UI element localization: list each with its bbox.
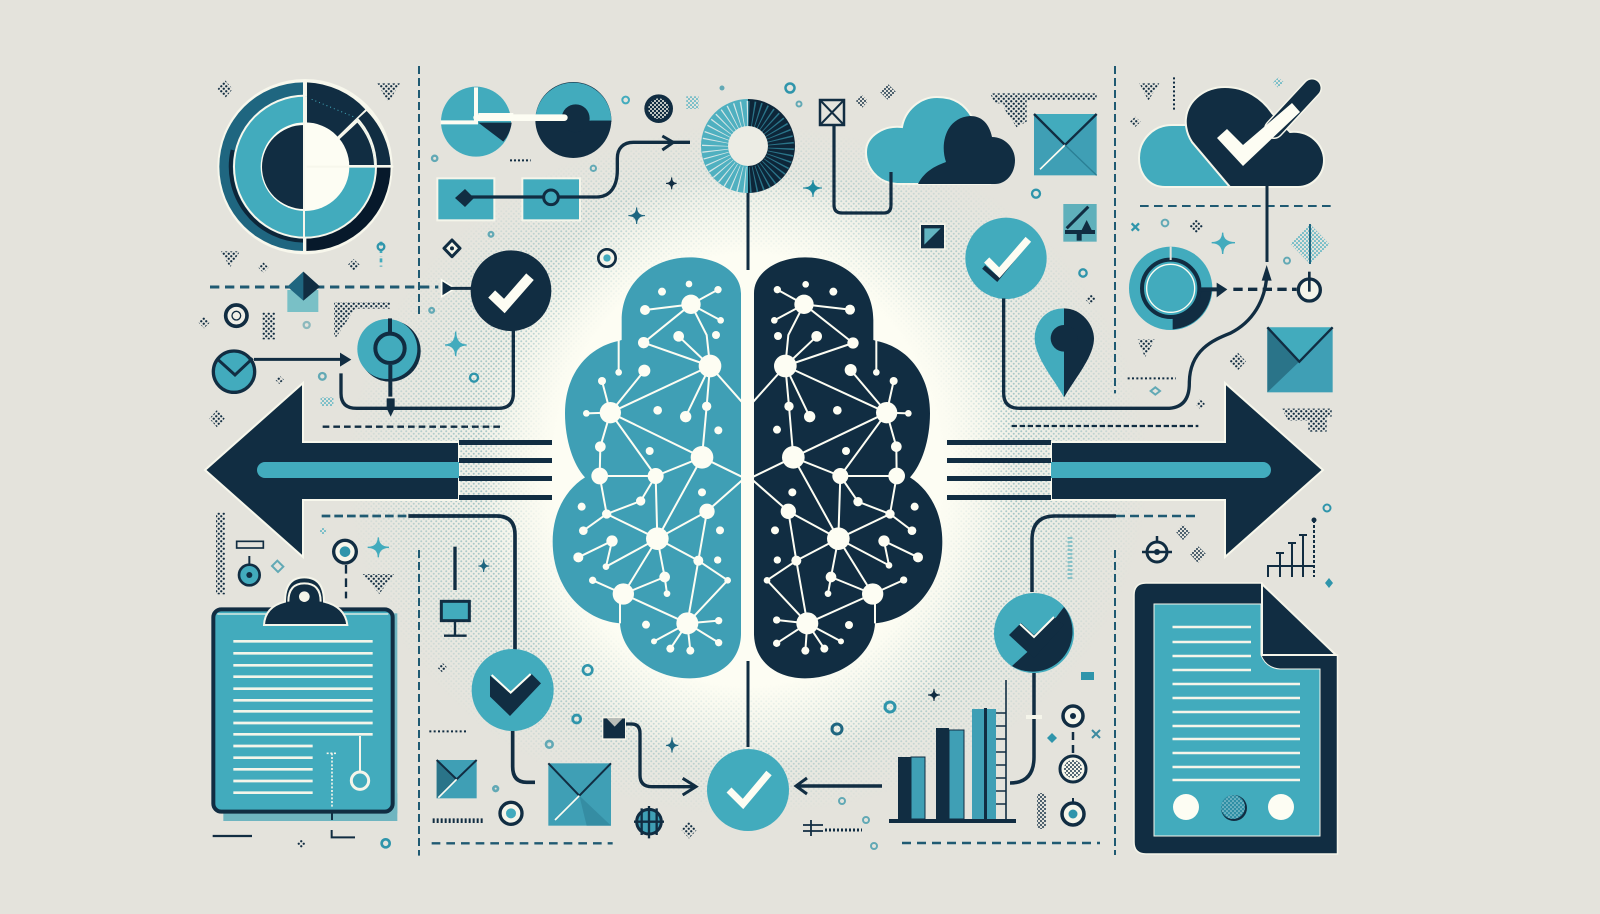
clipboard xyxy=(213,577,397,821)
icon: ring with stem xyxy=(239,556,260,585)
clipboard clip xyxy=(264,577,347,625)
top-left quadrant xyxy=(198,66,699,427)
brain: left hemisphere xyxy=(553,257,742,678)
connector: brain top line xyxy=(746,193,750,270)
brain xyxy=(553,257,942,678)
cloud: teal and navy xyxy=(866,97,1015,184)
check circle: teal xyxy=(965,218,1047,299)
bar chart xyxy=(889,680,1016,823)
check circle: bottom centre xyxy=(707,749,789,831)
icon: small teal ring 2 xyxy=(591,166,596,171)
small bar xyxy=(237,541,263,548)
document lines xyxy=(1172,627,1300,780)
arrow: right xyxy=(947,383,1323,557)
connector: arrow into bottom check xyxy=(796,778,882,794)
small decorations: top centre xyxy=(720,84,896,197)
mini bar chart xyxy=(1268,518,1316,577)
dotted decorations xyxy=(213,527,697,848)
flow boxes and arrow xyxy=(437,136,690,220)
icon: power circle xyxy=(1298,272,1320,301)
vertical dashed divider: right xyxy=(1114,550,1116,855)
sparkle teal xyxy=(368,537,389,557)
bottom-left quadrant xyxy=(213,513,697,856)
icon: dotted disc xyxy=(644,94,673,123)
icon: ring near brain xyxy=(598,249,616,267)
connector to cloud xyxy=(1004,265,1272,408)
vertical dashed divider xyxy=(416,66,422,317)
check circle: chevron xyxy=(472,649,554,782)
icon: small navy square xyxy=(919,223,946,250)
dashed line under pin xyxy=(1012,422,1198,429)
dashed line under target xyxy=(323,423,500,430)
icon: small X box with connector xyxy=(820,100,891,213)
icon: small teal grid xyxy=(686,96,699,109)
dashed line xyxy=(432,840,613,847)
sparkle xyxy=(666,737,678,753)
connector: dashed to check xyxy=(322,516,515,650)
donut chart xyxy=(217,79,393,254)
cloud with checkmark xyxy=(1139,87,1324,262)
clipboard text lines xyxy=(233,641,373,793)
icon: teal dotted diamond xyxy=(1291,224,1329,264)
envelope: upper xyxy=(1034,114,1097,175)
dashed line: bottom right xyxy=(902,842,1100,844)
top-right quadrant xyxy=(919,66,1333,432)
clipboard marker xyxy=(327,736,369,820)
icon: ring target left xyxy=(226,305,247,326)
dotted decorations xyxy=(198,80,400,427)
icon: ring with dashed stem xyxy=(334,540,356,598)
connector: check to bar chart xyxy=(1010,673,1034,783)
icon: crosshair xyxy=(1142,536,1172,562)
icon: mini scene xyxy=(1063,204,1097,242)
icon: small teal ring xyxy=(1032,190,1040,198)
brain: right hemisphere xyxy=(753,257,942,678)
horizontal dashed divider xyxy=(1140,203,1332,209)
dotted triangle band xyxy=(990,93,1097,127)
connector from check to target xyxy=(341,330,513,417)
half-dark circle xyxy=(477,82,611,158)
envelope: right xyxy=(1267,327,1333,392)
connector: brain bottom line xyxy=(746,661,750,747)
dotted column xyxy=(216,513,225,594)
dotted triangle xyxy=(363,574,394,594)
right column icons xyxy=(1060,706,1086,825)
icon: slider monitor xyxy=(441,547,469,636)
document fold xyxy=(1262,584,1336,655)
decorative dots row xyxy=(510,157,531,163)
envelope diamond xyxy=(287,272,320,312)
white tick on connector xyxy=(1026,715,1042,719)
icon: globe xyxy=(634,806,664,838)
target icon xyxy=(357,318,421,397)
dotted decorations xyxy=(1085,77,1332,432)
arrow: left xyxy=(205,383,552,557)
pie chart with bar xyxy=(441,87,513,157)
small decorations: lower right xyxy=(803,504,1333,849)
sparkle teal small xyxy=(478,559,489,572)
halftone glow behind brain xyxy=(361,138,1134,804)
horizontal dashed divider xyxy=(210,282,438,291)
document xyxy=(1134,583,1338,854)
icon: radial sunburst ring xyxy=(701,99,795,193)
icon: check badge with arrow xyxy=(213,351,351,392)
small teal rings xyxy=(382,665,592,847)
icon: diamond target xyxy=(444,240,460,257)
small teal rings xyxy=(304,156,493,382)
connector: right arrow to check xyxy=(1032,516,1198,592)
target ring with arrow xyxy=(1129,247,1297,330)
sparkle 2 xyxy=(628,207,645,224)
vertical dashed divider xyxy=(416,550,422,856)
sparkle xyxy=(666,177,677,189)
icon: small teal ring xyxy=(622,97,629,103)
document dots xyxy=(1173,794,1294,821)
check circle: teal and navy xyxy=(994,593,1074,673)
check circle: navy xyxy=(442,250,551,331)
icon: ring xyxy=(1079,269,1087,277)
icon: map pin xyxy=(1035,308,1094,397)
icon: ring xyxy=(500,802,522,824)
envelope: small xyxy=(437,760,477,798)
envelope: large xyxy=(548,763,611,826)
sparkle teal xyxy=(1212,233,1235,254)
vertical dashed divider xyxy=(1112,66,1118,393)
sparkle teal xyxy=(445,332,467,356)
small envelope with arrow xyxy=(602,717,696,795)
